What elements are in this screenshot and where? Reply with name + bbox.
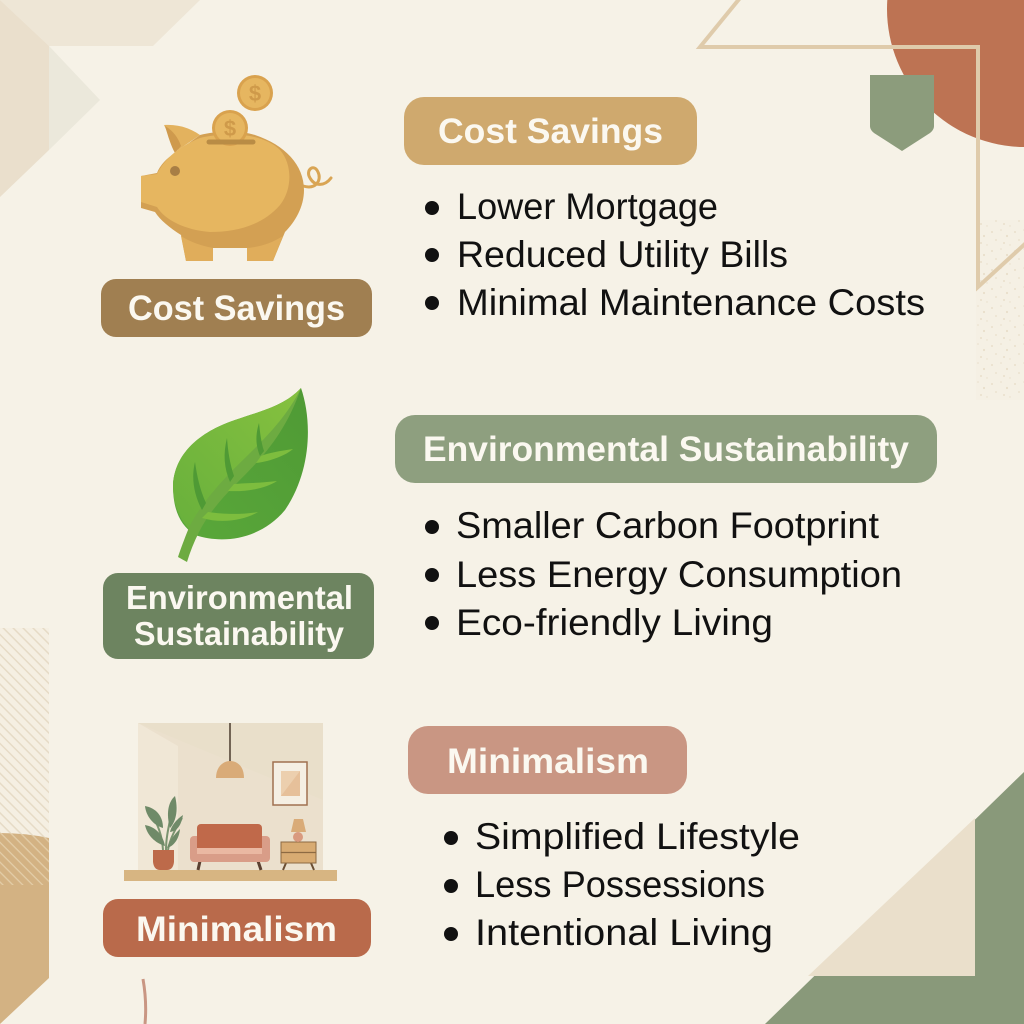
heading: environmental sustainability <box>395 415 937 483</box>
sofa <box>190 824 270 870</box>
nightstand with lamp <box>281 819 316 870</box>
coin slot <box>209 140 253 144</box>
label: minimalism (left) <box>103 899 371 957</box>
list: cost savings bullets: Reduced Utility Bills <box>457 234 788 275</box>
framed picture <box>273 762 307 805</box>
heading: minimalism <box>408 726 687 794</box>
room wall <box>138 723 323 870</box>
icon: piggy bank with coins <box>141 75 331 261</box>
label: cost savings (left): Cost Savings <box>128 289 345 328</box>
list: minimalism bullets: Simplified Lifestyle <box>475 816 800 857</box>
label: environmental sustainability (left): Environmental <box>126 579 353 616</box>
floor <box>124 870 337 881</box>
icon: green leaf <box>173 388 308 562</box>
list: cost savings bullets: Minimal Maintenance Costs <box>457 282 925 323</box>
leaf lower half <box>173 388 308 539</box>
leaf upper half <box>173 388 301 530</box>
decoration: outlined triangle frame <box>700 0 1024 287</box>
icon: falling coin <box>237 75 273 111</box>
pig ear <box>164 125 200 150</box>
label: environmental sustainability (left) <box>103 573 374 659</box>
decoration: top-left geometric shapes <box>0 0 200 197</box>
leaf veins <box>193 423 264 510</box>
icon: minimalist room <box>124 723 337 881</box>
list: environmental bullets: Eco-friendly Living <box>456 602 773 643</box>
pendant lamp <box>216 723 244 778</box>
decoration: left hatching and tan block <box>0 628 49 1024</box>
list: cost savings bullets <box>425 186 925 323</box>
list: minimalism bullets: Intentional Living <box>475 912 773 953</box>
label: cost savings (left) <box>101 279 372 337</box>
list: cost savings bullets: Lower Mortgage <box>457 186 718 227</box>
heading: minimalism: Minimalism <box>447 742 649 781</box>
label: environmental sustainability (left): Sustainability <box>134 615 345 652</box>
list: environmental bullets <box>425 505 902 643</box>
decoration: green shield <box>870 75 934 151</box>
icon: coin entering slot <box>212 110 248 146</box>
pig body highlight <box>141 134 289 232</box>
list: minimalism bullets <box>444 816 800 953</box>
icon: coin entering slot: $ <box>224 116 236 141</box>
list: minimalism bullets: Less Possessions <box>475 864 765 905</box>
pig ear inner <box>165 126 181 153</box>
label: minimalism (left): Minimalism <box>136 910 337 949</box>
pig left leg <box>181 236 213 261</box>
leaf stem and midrib <box>178 388 301 562</box>
heading: cost savings <box>404 97 697 165</box>
potted plant <box>145 796 183 870</box>
pig tail <box>303 168 331 187</box>
list: environmental bullets: Smaller Carbon Footprint <box>456 505 880 546</box>
pig right leg <box>247 236 283 261</box>
decoration: speckled texture <box>976 220 1024 400</box>
decoration: top-right circle <box>887 0 1024 147</box>
icon: falling coin: $ <box>249 81 261 106</box>
decoration: small curved stroke <box>143 979 146 1024</box>
pig eye <box>170 166 180 176</box>
heading: cost savings: Cost Savings <box>438 112 663 151</box>
heading: environmental sustainability: Environmental Sustainability <box>423 430 910 469</box>
decoration: bottom-right corner shapes <box>765 772 1024 1024</box>
list: environmental bullets: Less Energy Consumption <box>456 554 902 595</box>
pig body <box>141 132 304 261</box>
